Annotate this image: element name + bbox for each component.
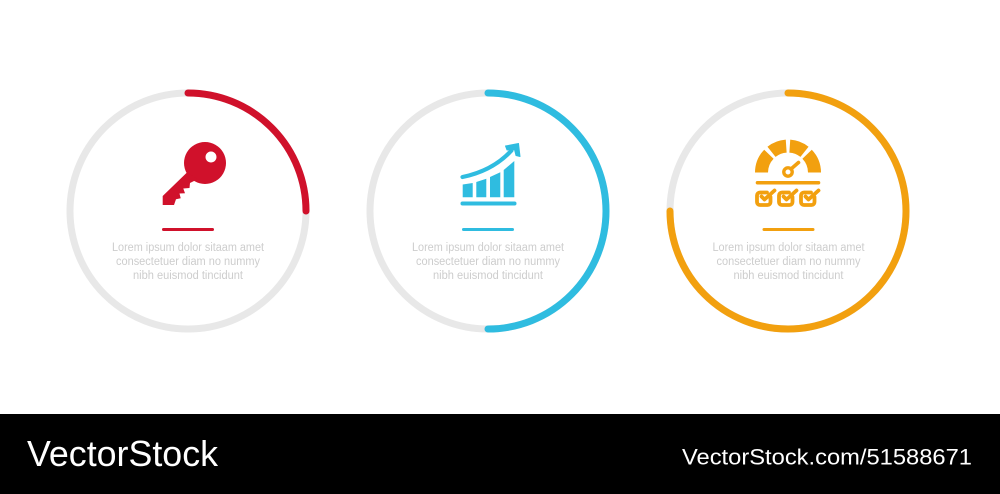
text block: nibh euismod tincidunt [133, 270, 244, 282]
text block: nibh euismod tincidunt [433, 270, 544, 282]
text block [412, 242, 565, 282]
footer image id: VectorStock.com/51588671 [682, 444, 972, 470]
progress ring: three quarters orange [670, 93, 906, 329]
panel: gauge item [670, 93, 906, 329]
text block: Lorem ipsum dolor sitaam amet [112, 242, 265, 254]
text block: consectetuer diam no nummy [116, 256, 260, 268]
divider line [462, 228, 514, 231]
footer band [0, 414, 1000, 494]
progress ring: half blue [370, 93, 606, 329]
text block: nibh euismod tincidunt [734, 270, 844, 282]
icon: rising bar chart [460, 144, 520, 206]
progress ring: quarter red [70, 93, 306, 329]
text block [112, 242, 265, 282]
icon: gauge with checkboxes [756, 146, 820, 205]
text block: Lorem ipsum dolor sitaam amet [712, 242, 865, 254]
panel: key item [70, 93, 306, 329]
panel: growth chart item [370, 93, 606, 329]
icon: key [163, 142, 226, 205]
divider line [762, 228, 814, 231]
text block: Lorem ipsum dolor sitaam amet [412, 242, 565, 254]
text block: consectetuer diam no nummy [716, 256, 861, 268]
divider line [162, 228, 214, 231]
text block [712, 242, 865, 282]
text block: consectetuer diam no nummy [416, 256, 560, 268]
footer logo text: VectorStock [27, 433, 219, 474]
